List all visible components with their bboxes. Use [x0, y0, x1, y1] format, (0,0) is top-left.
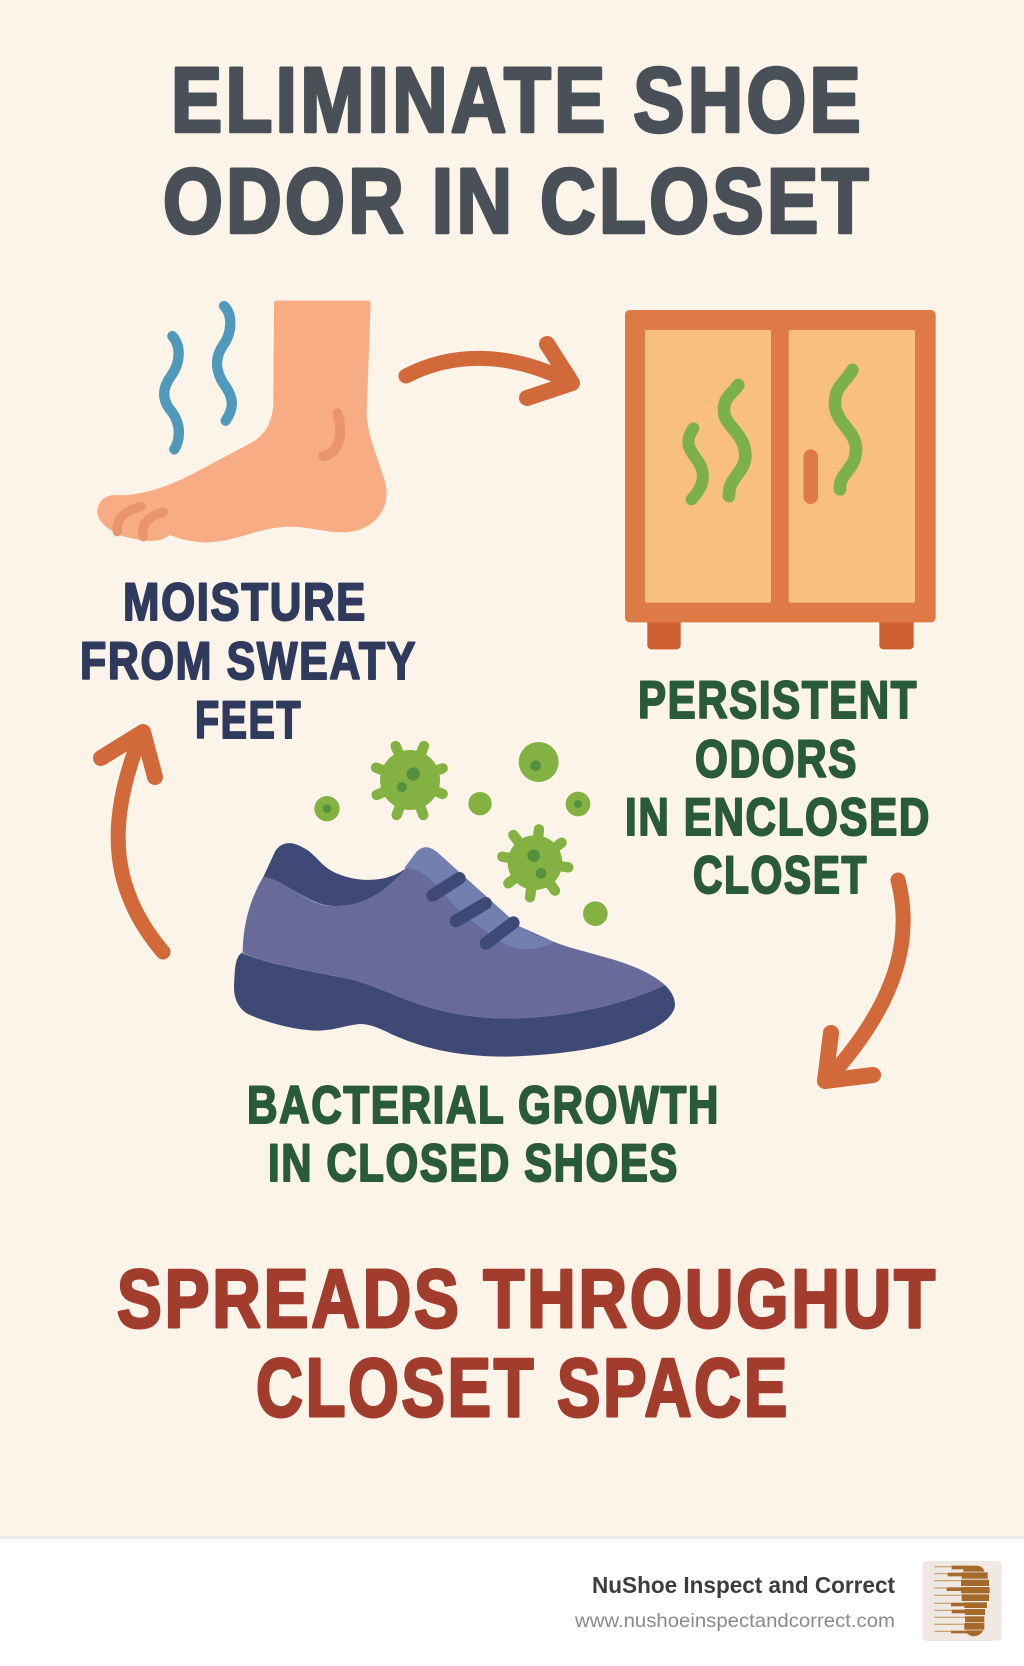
website: www.nushoeinspectandcorrect.com [574, 1610, 895, 1632]
label: moisture [80, 573, 417, 750]
icon: closet with odor [625, 310, 936, 649]
label: moisture: MOISTURE [123, 573, 367, 632]
label: moisture: FEET [195, 691, 302, 750]
title: ODOR IN CLOSET [163, 150, 872, 252]
label: bacterial growth: IN CLOSED SHOES [268, 1134, 679, 1193]
arrow: shoe to foot [101, 732, 163, 952]
footer [0, 1536, 1024, 1666]
label: persistent odors [625, 671, 931, 905]
icon: shoe with bacteria [234, 742, 675, 1057]
logo [922, 1561, 1002, 1641]
label: bacterial growth: BACTERIAL GROWTH [247, 1076, 720, 1135]
conclusion text [117, 1252, 938, 1434]
label: persistent odors: IN ENCLOSED [625, 788, 931, 847]
label: persistent odors: CLOSET [693, 846, 868, 905]
arrow: closet to shoe [825, 880, 903, 1081]
label: persistent odors: ODORS [695, 730, 858, 789]
conclusion text: CLOSET SPACE [256, 1341, 790, 1434]
arrow: foot to closet [406, 344, 572, 398]
label: moisture: FROM SWEATY [80, 632, 417, 691]
title [163, 50, 872, 252]
brand name: NuShoe Inspect and Correct [592, 1572, 895, 1598]
icon: sweaty foot [97, 301, 387, 542]
label: bacterial growth [247, 1076, 720, 1193]
shoe [234, 843, 675, 1057]
title: ELIMINATE SHOE [171, 50, 864, 152]
label: persistent odors: PERSISTENT [638, 671, 918, 730]
bacteria [314, 742, 608, 926]
